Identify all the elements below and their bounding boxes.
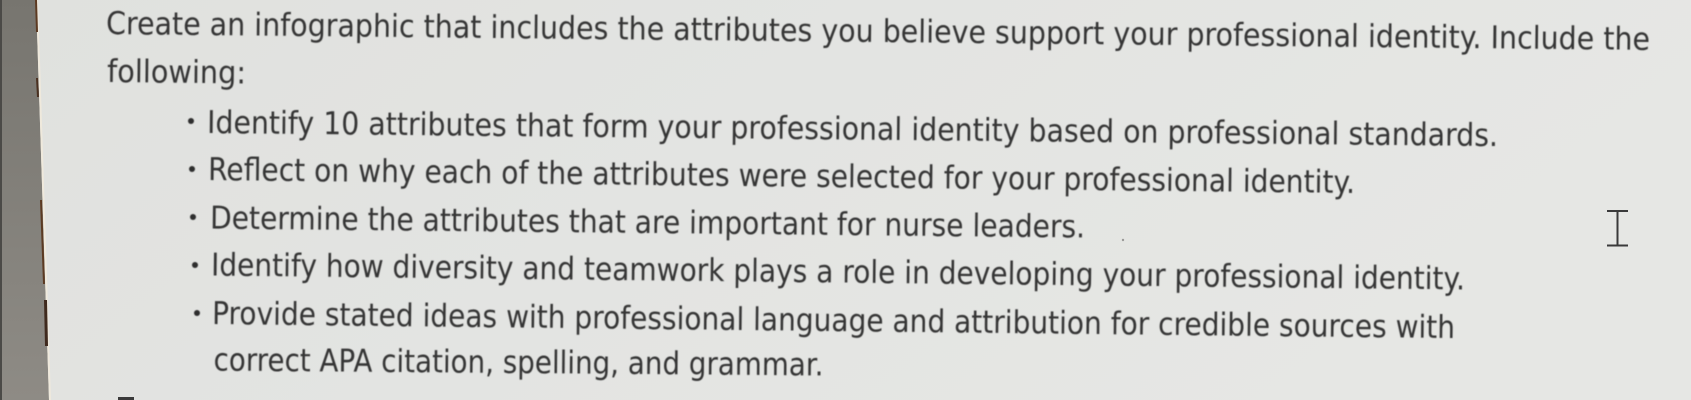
top edge of the cut-off next text line xyxy=(118,397,134,400)
bullet 5: Provide stated ideas with professional language and attribution for credible sources with xyxy=(212,296,1455,346)
icon: text cursor xyxy=(1607,211,1628,246)
bullet 5 xyxy=(194,296,1455,384)
bullet 2: Reflect on why each of the attributes were selected for your professional identity. xyxy=(208,152,1355,201)
left monitor bezel xyxy=(0,0,51,400)
intro sentence xyxy=(106,6,1650,91)
intro sentence: following: xyxy=(107,54,246,91)
speck on screen xyxy=(1122,239,1124,241)
bullet 5: correct APA citation, spelling, and grammar. xyxy=(213,343,824,384)
bullet 4: Identify how diversity and teamwork plays a role in developing your professional identity. xyxy=(211,248,1465,298)
bullet 1: Identify 10 attributes that form your professional identity based on professional standards. xyxy=(207,105,1498,154)
bullet 3: Determine the attributes that are important for nurse leaders. xyxy=(210,201,1085,246)
